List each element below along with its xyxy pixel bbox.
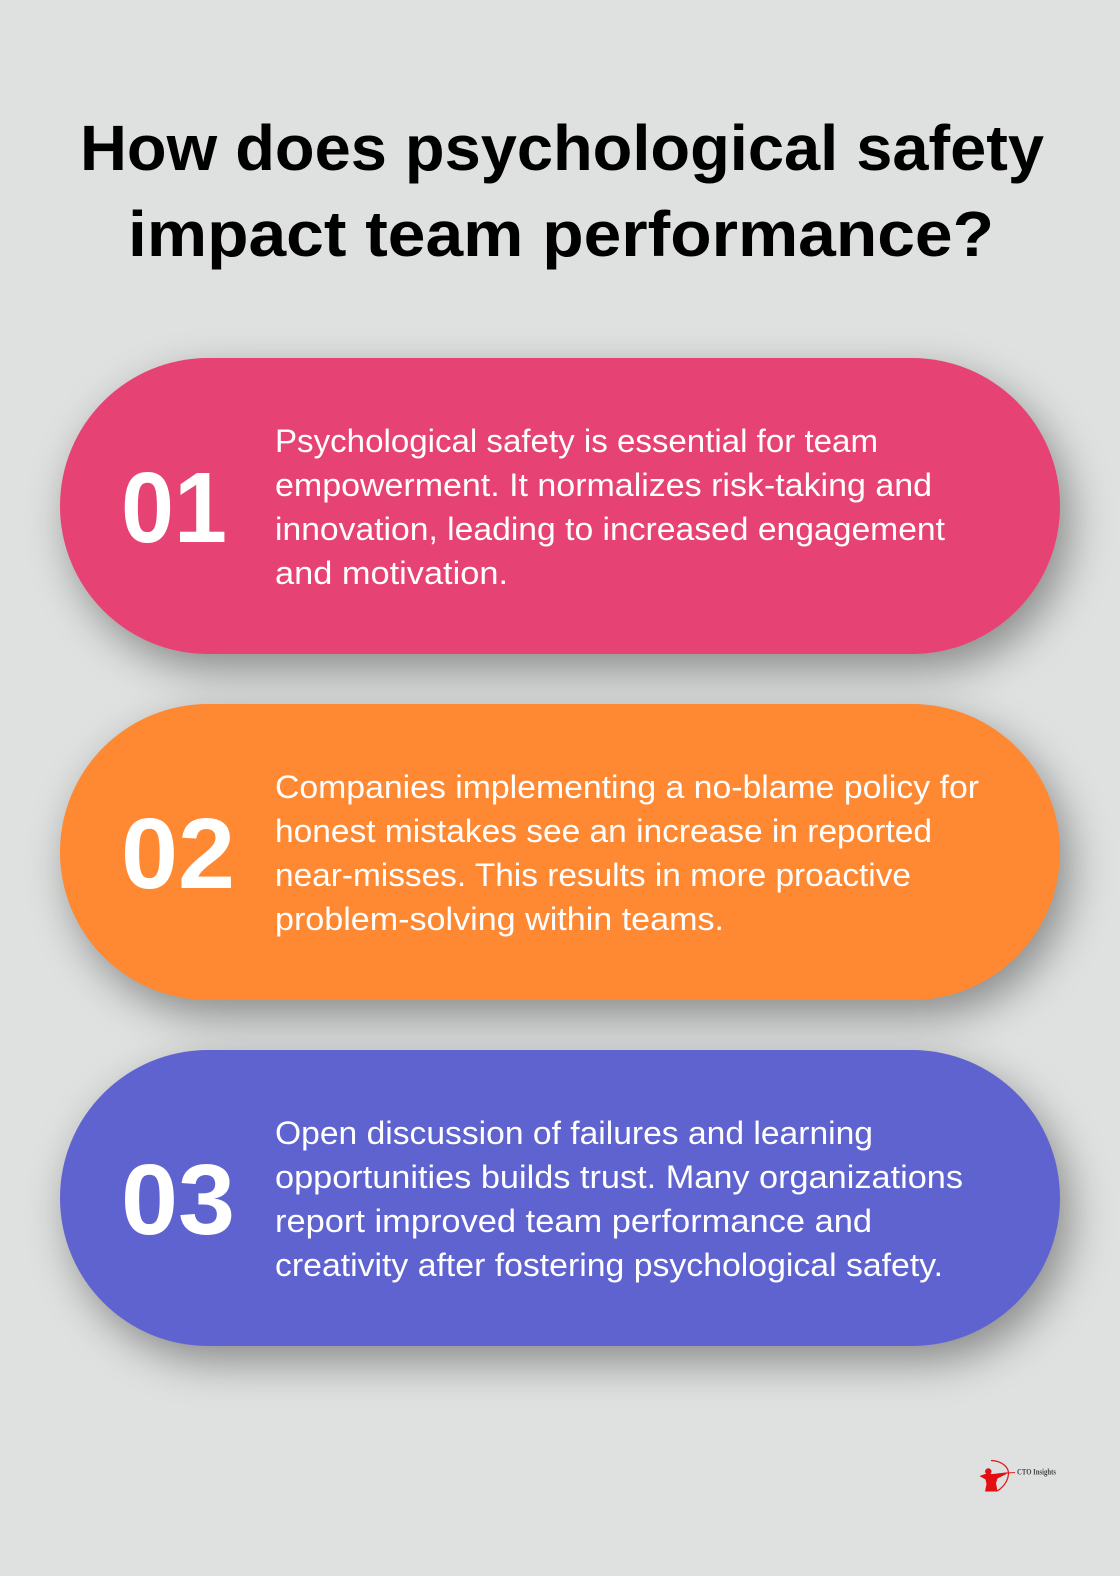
icon: red archer (980, 1460, 1015, 1492)
panel: step 02 (60, 704, 1060, 1000)
text: step 01 description (275, 423, 945, 591)
text: step 02 description: Companies implementing a no-blame policy for (275, 769, 979, 805)
text: step 01 description: innovation, leading to increased engagement (275, 511, 945, 547)
text: step 02 description: problem-solving within teams. (275, 901, 724, 937)
number 03: 03 (121, 1144, 235, 1256)
text: step 03 description: report improved team performance and (275, 1203, 872, 1239)
panel: step 03 (60, 1050, 1060, 1346)
text: step 03 description: creativity after fostering psychological safety. (275, 1247, 943, 1283)
logo: CTO Insights (980, 1460, 1056, 1492)
logo wordmark: CTO Insights (1017, 1468, 1056, 1476)
text: step 01 description: and motivation. (275, 555, 508, 591)
text: step 02 description: honest mistakes see an increase in reported (275, 813, 932, 849)
text: step 01 description: empowerment. It normalizes risk-taking and (275, 467, 932, 503)
panel: step 01 (60, 358, 1060, 654)
text: step 01 description: Psychological safety is essential for team (275, 423, 878, 459)
number 01: 01 (121, 452, 227, 564)
text: step 03 description: opportunities builds trust. Many organizations (275, 1159, 963, 1195)
text: step 03 description: Open discussion of failures and learning (275, 1115, 873, 1151)
text: step 02 description (275, 769, 979, 937)
text: step 02 description: near-misses. This results in more proactive (275, 857, 911, 893)
title (80, 112, 1044, 270)
title: impact team performance? (128, 198, 994, 270)
number 02: 02 (121, 798, 235, 910)
title: How does psychological safety (80, 112, 1044, 184)
text: step 03 description (275, 1115, 963, 1283)
